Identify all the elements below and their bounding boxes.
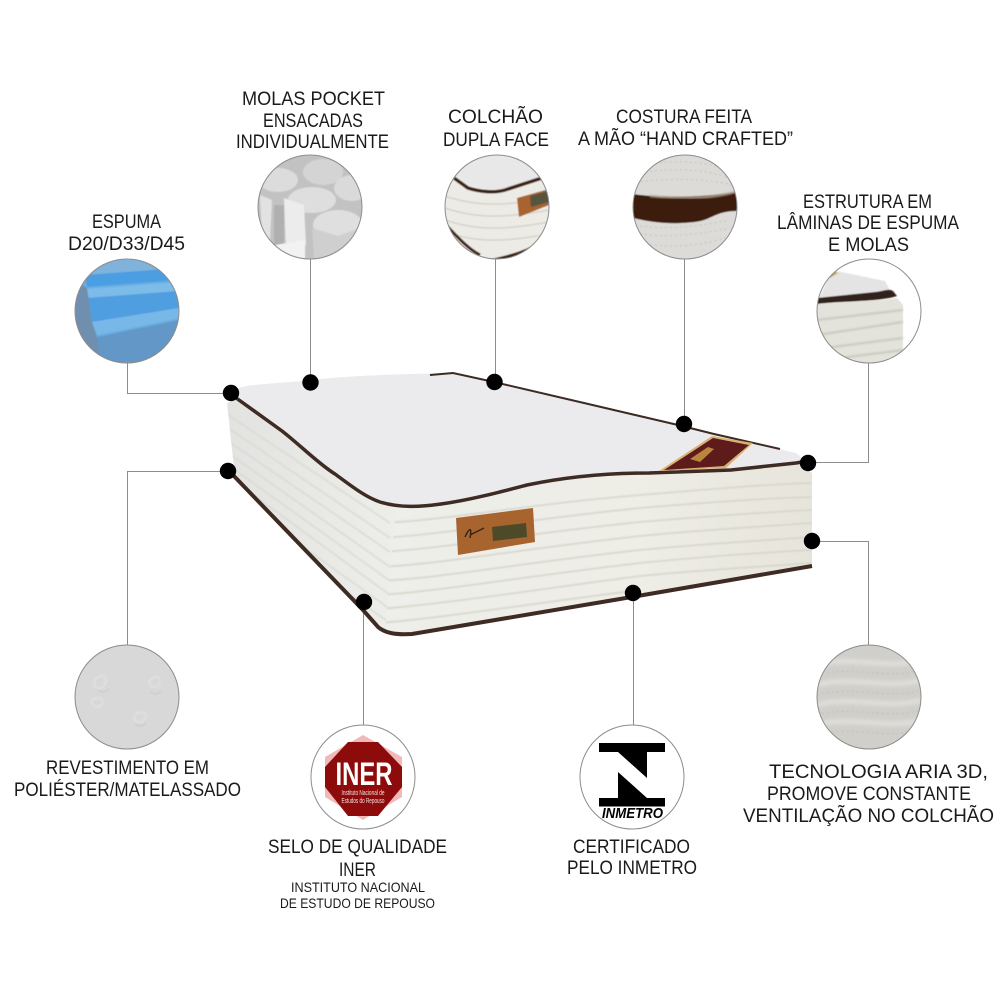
- caption: inmetro: CERTIFICADO: [573, 837, 690, 858]
- icon: iner seal: INER: [336, 756, 392, 792]
- icon ring: [445, 155, 549, 259]
- heading: espuma: ESPUMA: [92, 212, 161, 233]
- caption: revestimento: POLIÉSTER/MATELASSADO: [14, 780, 241, 801]
- panel: iner: [268, 725, 447, 911]
- caption: tecnologia aria: VENTILAÇÃO NO COLCHÃO: [743, 805, 994, 827]
- heading: estrutura: LÂMINAS DE ESPUMA: [777, 212, 959, 234]
- icon: iner seal: Estudos do Repouso: [342, 798, 385, 805]
- heading: dupla face: COLCHÃO: [448, 106, 543, 128]
- caption: revestimento: REVESTIMENTO EM: [46, 758, 209, 779]
- top tag: [659, 436, 753, 471]
- heading: molas pocket: ENSACADAS: [263, 111, 363, 132]
- heading: molas pocket: [236, 89, 389, 153]
- heading: dupla face: [443, 106, 549, 151]
- icon: inmetro mark: [580, 725, 684, 829]
- icon: inmetro mark: INMETRO: [602, 805, 663, 822]
- icon: quilted fabric: [75, 645, 179, 749]
- mattress top face: [230, 373, 808, 507]
- icon: iner seal: [311, 725, 415, 829]
- icon: mattress corner: [445, 155, 549, 259]
- caption: revestimento: [14, 758, 241, 801]
- panel: inmetro: [567, 725, 697, 879]
- panel: dupla face: [443, 106, 549, 259]
- icon ring: [75, 645, 179, 749]
- connector lines: [128, 259, 868, 725]
- callout dots: [220, 374, 820, 610]
- mattress front face: [383, 464, 812, 633]
- caption: iner: [268, 837, 447, 911]
- heading: costura: COSTURA FEITA: [616, 107, 752, 128]
- caption: iner: DE ESTUDO DE REPOUSO: [280, 895, 435, 911]
- icon ring: [633, 155, 737, 259]
- leather label: [456, 508, 535, 555]
- caption: iner: SELO DE QUALIDADE: [268, 837, 447, 858]
- caption: inmetro: [567, 837, 697, 879]
- panel: costura: [578, 107, 793, 259]
- panel: espuma: [68, 212, 185, 363]
- icon: pocket springs: [258, 155, 370, 259]
- panel: estrutura: [777, 192, 959, 363]
- caption: tecnologia aria: PROMOVE CONSTANTE: [767, 784, 971, 805]
- icon ring: [817, 259, 921, 363]
- top back piping: [430, 373, 780, 449]
- icon ring: [817, 645, 921, 749]
- caption: inmetro: PELO INMETRO: [567, 858, 697, 879]
- heading: estrutura: [777, 192, 959, 256]
- heading: espuma: [68, 212, 185, 255]
- caption: iner: INER: [339, 860, 376, 881]
- icon: mattress edge: [817, 270, 903, 363]
- icon ring: [258, 155, 362, 259]
- heading: estrutura: ESTRUTURA EM: [803, 192, 932, 213]
- caption: tecnologia aria: [743, 762, 994, 827]
- icon: stitched piping: [633, 155, 737, 259]
- icon: blue foam: [75, 259, 180, 363]
- panel: molas pocket: [236, 89, 389, 259]
- heading: estrutura: E MOLAS: [828, 235, 909, 256]
- heading: molas pocket: MOLAS POCKET: [242, 89, 385, 110]
- heading: costura: [578, 107, 793, 150]
- mattress left side: [227, 400, 395, 628]
- panel: tecnologia aria: [743, 645, 994, 827]
- bottom piping: [232, 474, 812, 634]
- heading: espuma: D20/D33/D45: [68, 234, 185, 255]
- icon: iner seal: Instituto Nacional de: [342, 790, 385, 797]
- top front piping: [232, 395, 808, 506]
- icon: 3d fabric: [817, 645, 921, 749]
- heading: dupla face: DUPLA FACE: [443, 130, 549, 151]
- caption: iner: INSTITUTO NACIONAL: [291, 879, 425, 895]
- panel: revestimento: [14, 645, 241, 801]
- heading: costura: A MÃO “HAND CRAFTED”: [578, 128, 793, 150]
- caption: tecnologia aria: TECNOLOGIA ARIA 3D,: [769, 762, 988, 783]
- heading: molas pocket: INDIVIDUALMENTE: [236, 132, 389, 153]
- mattress: [220, 373, 820, 640]
- icon ring: [75, 259, 179, 363]
